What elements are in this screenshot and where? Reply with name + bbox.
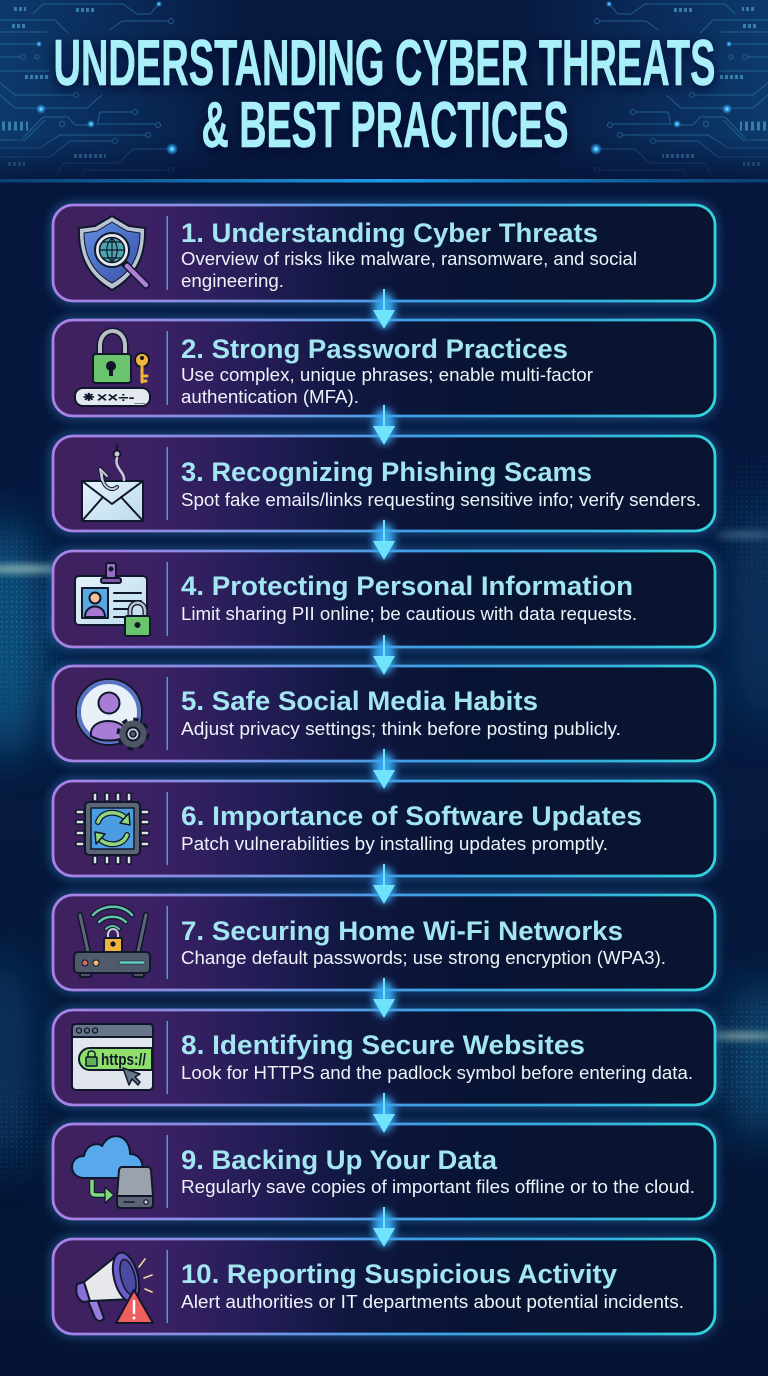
icon: padlock, key and password field (75, 331, 150, 406)
icon: megaphone with warning triangle (76, 1250, 153, 1323)
icon: browser with https address bar: https:// (101, 1050, 146, 1069)
arrow: 5 to 6 (373, 749, 395, 789)
arrow: 4 to 5 (373, 635, 395, 675)
icon: user profile with settings gear (76, 679, 146, 748)
icon: fishing hook on envelope (82, 445, 143, 521)
panel: 4 Protecting Personal Information (53, 551, 715, 647)
panel: 7 Securing Home Wi-Fi Networks (53, 895, 715, 990)
icon: browser with https address bar (72, 1024, 153, 1090)
icon: cloud backup to hard drive (72, 1136, 153, 1208)
heading: 1. Understanding Cyber Threats (181, 218, 598, 248)
heading: 2. Strong Password Practices (181, 334, 568, 364)
arrow: 6 to 7 (373, 864, 395, 904)
description: Overview of risks like malware, ransomware, and social (181, 249, 637, 269)
description: Patch vulnerabilities by installing updates promptly. (181, 834, 608, 854)
panel: 9 Backing Up Your Data (53, 1124, 715, 1219)
heading: 4. Protecting Personal Information (181, 571, 633, 601)
arrow: 7 to 8 (373, 978, 395, 1018)
heading: 8. Identifying Secure Websites (181, 1030, 585, 1060)
description: Limit sharing PII online; be cautious with data requests. (181, 604, 637, 624)
icon: padlock, key and password field: ⁕××÷-_ (81, 389, 145, 405)
arrow: 3 to 4 (373, 520, 395, 560)
background (0, 442, 768, 1182)
panel: 3 Recognizing Phishing Scams (53, 436, 715, 531)
panel: 2 Strong Password Practices: authentication (MFA). (181, 387, 359, 407)
arrow: 8 to 9 (373, 1093, 395, 1133)
panel: 2 Strong Password Practices (53, 320, 715, 416)
description: Look for HTTPS and the padlock symbol before entering data. (181, 1063, 693, 1083)
heading: 6. Importance of Software Updates (181, 801, 642, 831)
panel: 6 Importance of Software Updates (53, 781, 715, 876)
arrow: 2 to 3 (373, 405, 395, 445)
icon: router with wi-fi and padlock (74, 907, 150, 977)
panel: 5 Safe Social Media Habits (53, 666, 715, 761)
heading: 5. Safe Social Media Habits (181, 686, 538, 716)
icon: shield with globe and magnifier (79, 216, 146, 290)
header band with circuit pattern (0, 0, 768, 182)
description: Change default passwords; use strong encryption (WPA3). (181, 948, 666, 968)
heading: 3. Recognizing Phishing Scams (181, 457, 592, 487)
panel: 8 Identifying Secure Websites (53, 1010, 715, 1105)
description: Adjust privacy settings; think before posting publicly. (181, 719, 621, 739)
panel: 1 Understanding Cyber Threats: engineering. (181, 271, 284, 291)
panel: 10 Reporting Suspicious Activity (53, 1239, 715, 1334)
arrow: 1 to 2 (373, 289, 395, 329)
heading: 7. Securing Home Wi-Fi Networks (181, 916, 623, 946)
description: Spot fake emails/links requesting sensitive info; verify senders. (181, 490, 701, 510)
arrow: 9 to 10 (373, 1207, 395, 1247)
icon: ID card with padlock (75, 563, 150, 636)
panel: 1 Understanding Cyber Threats (53, 205, 715, 301)
heading: 9. Backing Up Your Data (181, 1145, 498, 1175)
heading: 10. Reporting Suspicious Activity (181, 1259, 617, 1289)
description: Alert authorities or IT departments about potential incidents. (181, 1292, 684, 1312)
description: Use complex, unique phrases; enable multi-factor (181, 365, 593, 385)
title (54, 27, 716, 161)
description: Regularly save copies of important files offline or to the cloud. (181, 1177, 695, 1197)
icon: processor chip with refresh arrows (76, 793, 149, 864)
